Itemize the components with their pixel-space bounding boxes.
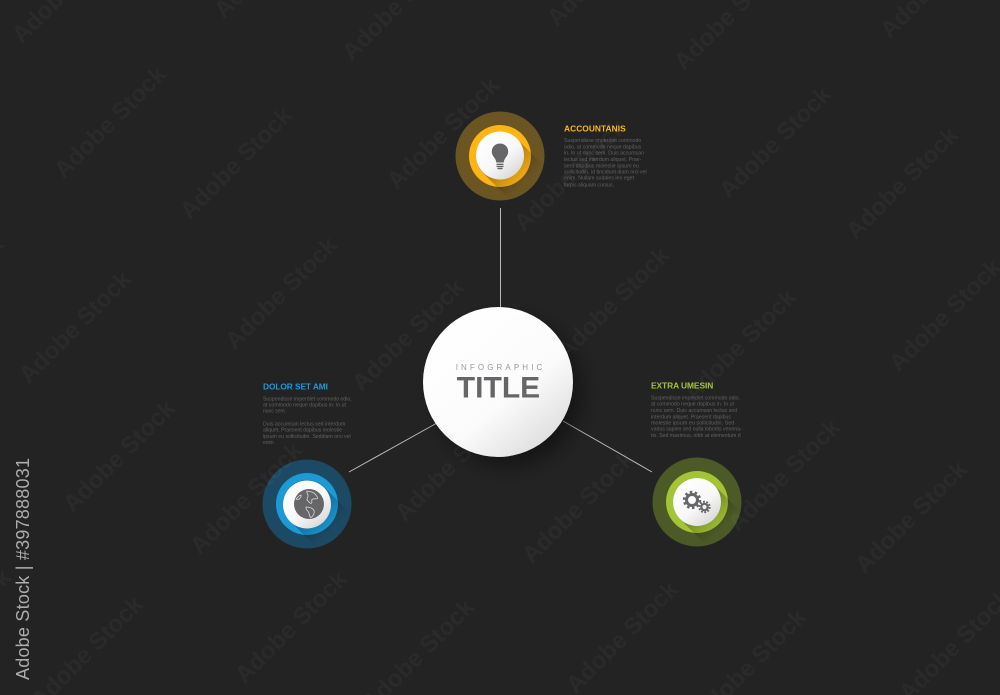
side stock id label: Adobe Stock | #397888031: [13, 458, 33, 680]
watermarks: Adobe Stock: [552, 241, 675, 365]
text block: dolor set ami: [263, 381, 352, 446]
watermarks: Adobe Stock: [175, 101, 298, 225]
text block: accountants: in. In ut nunc sem. Duis accumsan: [564, 151, 644, 157]
icon: globe: [294, 489, 324, 519]
text block: dolor set ami: at commodo neque dapibus in. In ut: [263, 402, 346, 408]
text block: dolor set ami: nunc sem.: [263, 409, 286, 415]
text block: extra umesin: interdum aliquet. Praesent dapibus: [651, 414, 731, 420]
watermarks: Adobe Stock: [390, 403, 513, 527]
text block: extra umesin: at commodo neque dapibus in. In ut: [651, 402, 734, 408]
text block: accountants: turpis aliquam cursus.: [564, 182, 614, 188]
node: dolor set ami (left): [262, 460, 352, 548]
text block: accountants: sent dapibus molestie ipsum eu: [564, 163, 639, 169]
watermarks: Adobe Stock: [347, 273, 470, 397]
text block: extra umesin: EXTRA UMESIN: [651, 381, 713, 391]
watermarks: Adobe Stock: [220, 231, 343, 355]
text block: dolor set ami: aliquet. Praesent dapibus molestie: [263, 428, 342, 434]
watermarks: Adobe Stock: [14, 265, 137, 389]
text block: extra umesin: molestie ipsum eu sollicitudin. Sed: [651, 421, 734, 427]
text block: extra umesin: Suspendisse imperdiet commodo odio,: [651, 395, 740, 401]
text block: accountants: odio, at commodo neque dapibus: [564, 144, 642, 150]
central title: INFOGRAPHIC: [456, 363, 543, 372]
watermarks: Adobe Stock: [185, 436, 308, 560]
text block: extra umesin: varius sapien sed nulla lobortis venena-: [651, 427, 742, 433]
icon: gears: [684, 492, 710, 512]
watermarks: Adobe Stock: [49, 60, 172, 184]
node: extra umesin (right): [652, 458, 742, 546]
text block: extra umesin: nunc sem. Duis accumsan lectus sed: [651, 408, 737, 414]
text block: extra umesin: [651, 381, 742, 439]
watermarks: Adobe Stock: [841, 121, 964, 245]
text block: dolor set ami: Duis accumsan lectus sed interdum: [263, 421, 346, 427]
watermarks: Adobe Stock: [714, 80, 837, 204]
node: accountants (top): [456, 112, 544, 200]
text block: dolor set ami: Suspendisse imperdiet commodo odio,: [263, 396, 352, 402]
text block: accountants: Suspendisse imperdiet commodo: [564, 138, 641, 144]
text block: accountants: enim. Nullam sodales leo eget: [564, 176, 634, 182]
watermarks: Adobe Stock: [509, 113, 632, 237]
watermarks: Adobe Stock: [679, 283, 802, 407]
text block: accountants: ACCOUNTANIS: [564, 123, 626, 133]
watermarks: Adobe Stock: [382, 71, 505, 195]
text block: accountants: sollicitudin, id tincidunt diam orci vel: [564, 169, 647, 175]
text block: dolor set ami: ipsum eu sollicitudin. Seddiam orci vel: [263, 434, 351, 440]
text block: dolor set ami: DOLOR SET AMI: [263, 381, 328, 391]
watermarks: Adobe Stock: [723, 413, 846, 537]
text block: dolor set ami: enim.: [263, 440, 275, 446]
watermarks: Adobe Stock: [58, 394, 181, 518]
connector lines: [349, 208, 652, 472]
watermarks: Adobe Stock: [850, 455, 973, 579]
watermarks: Adobe Stock: [517, 445, 640, 569]
text block: accountants: [564, 123, 647, 188]
text block: accountants: lectus sed interdum aliquet. Prae-: [564, 157, 641, 163]
central title: TITLE: [457, 372, 540, 405]
icon: light bulb: [492, 144, 508, 169]
watermarks: Adobe Stock: [230, 565, 353, 689]
text block: extra umesin: tis. Sed maximus, nibh at elementum d: [651, 433, 741, 439]
central circle: [423, 307, 582, 466]
